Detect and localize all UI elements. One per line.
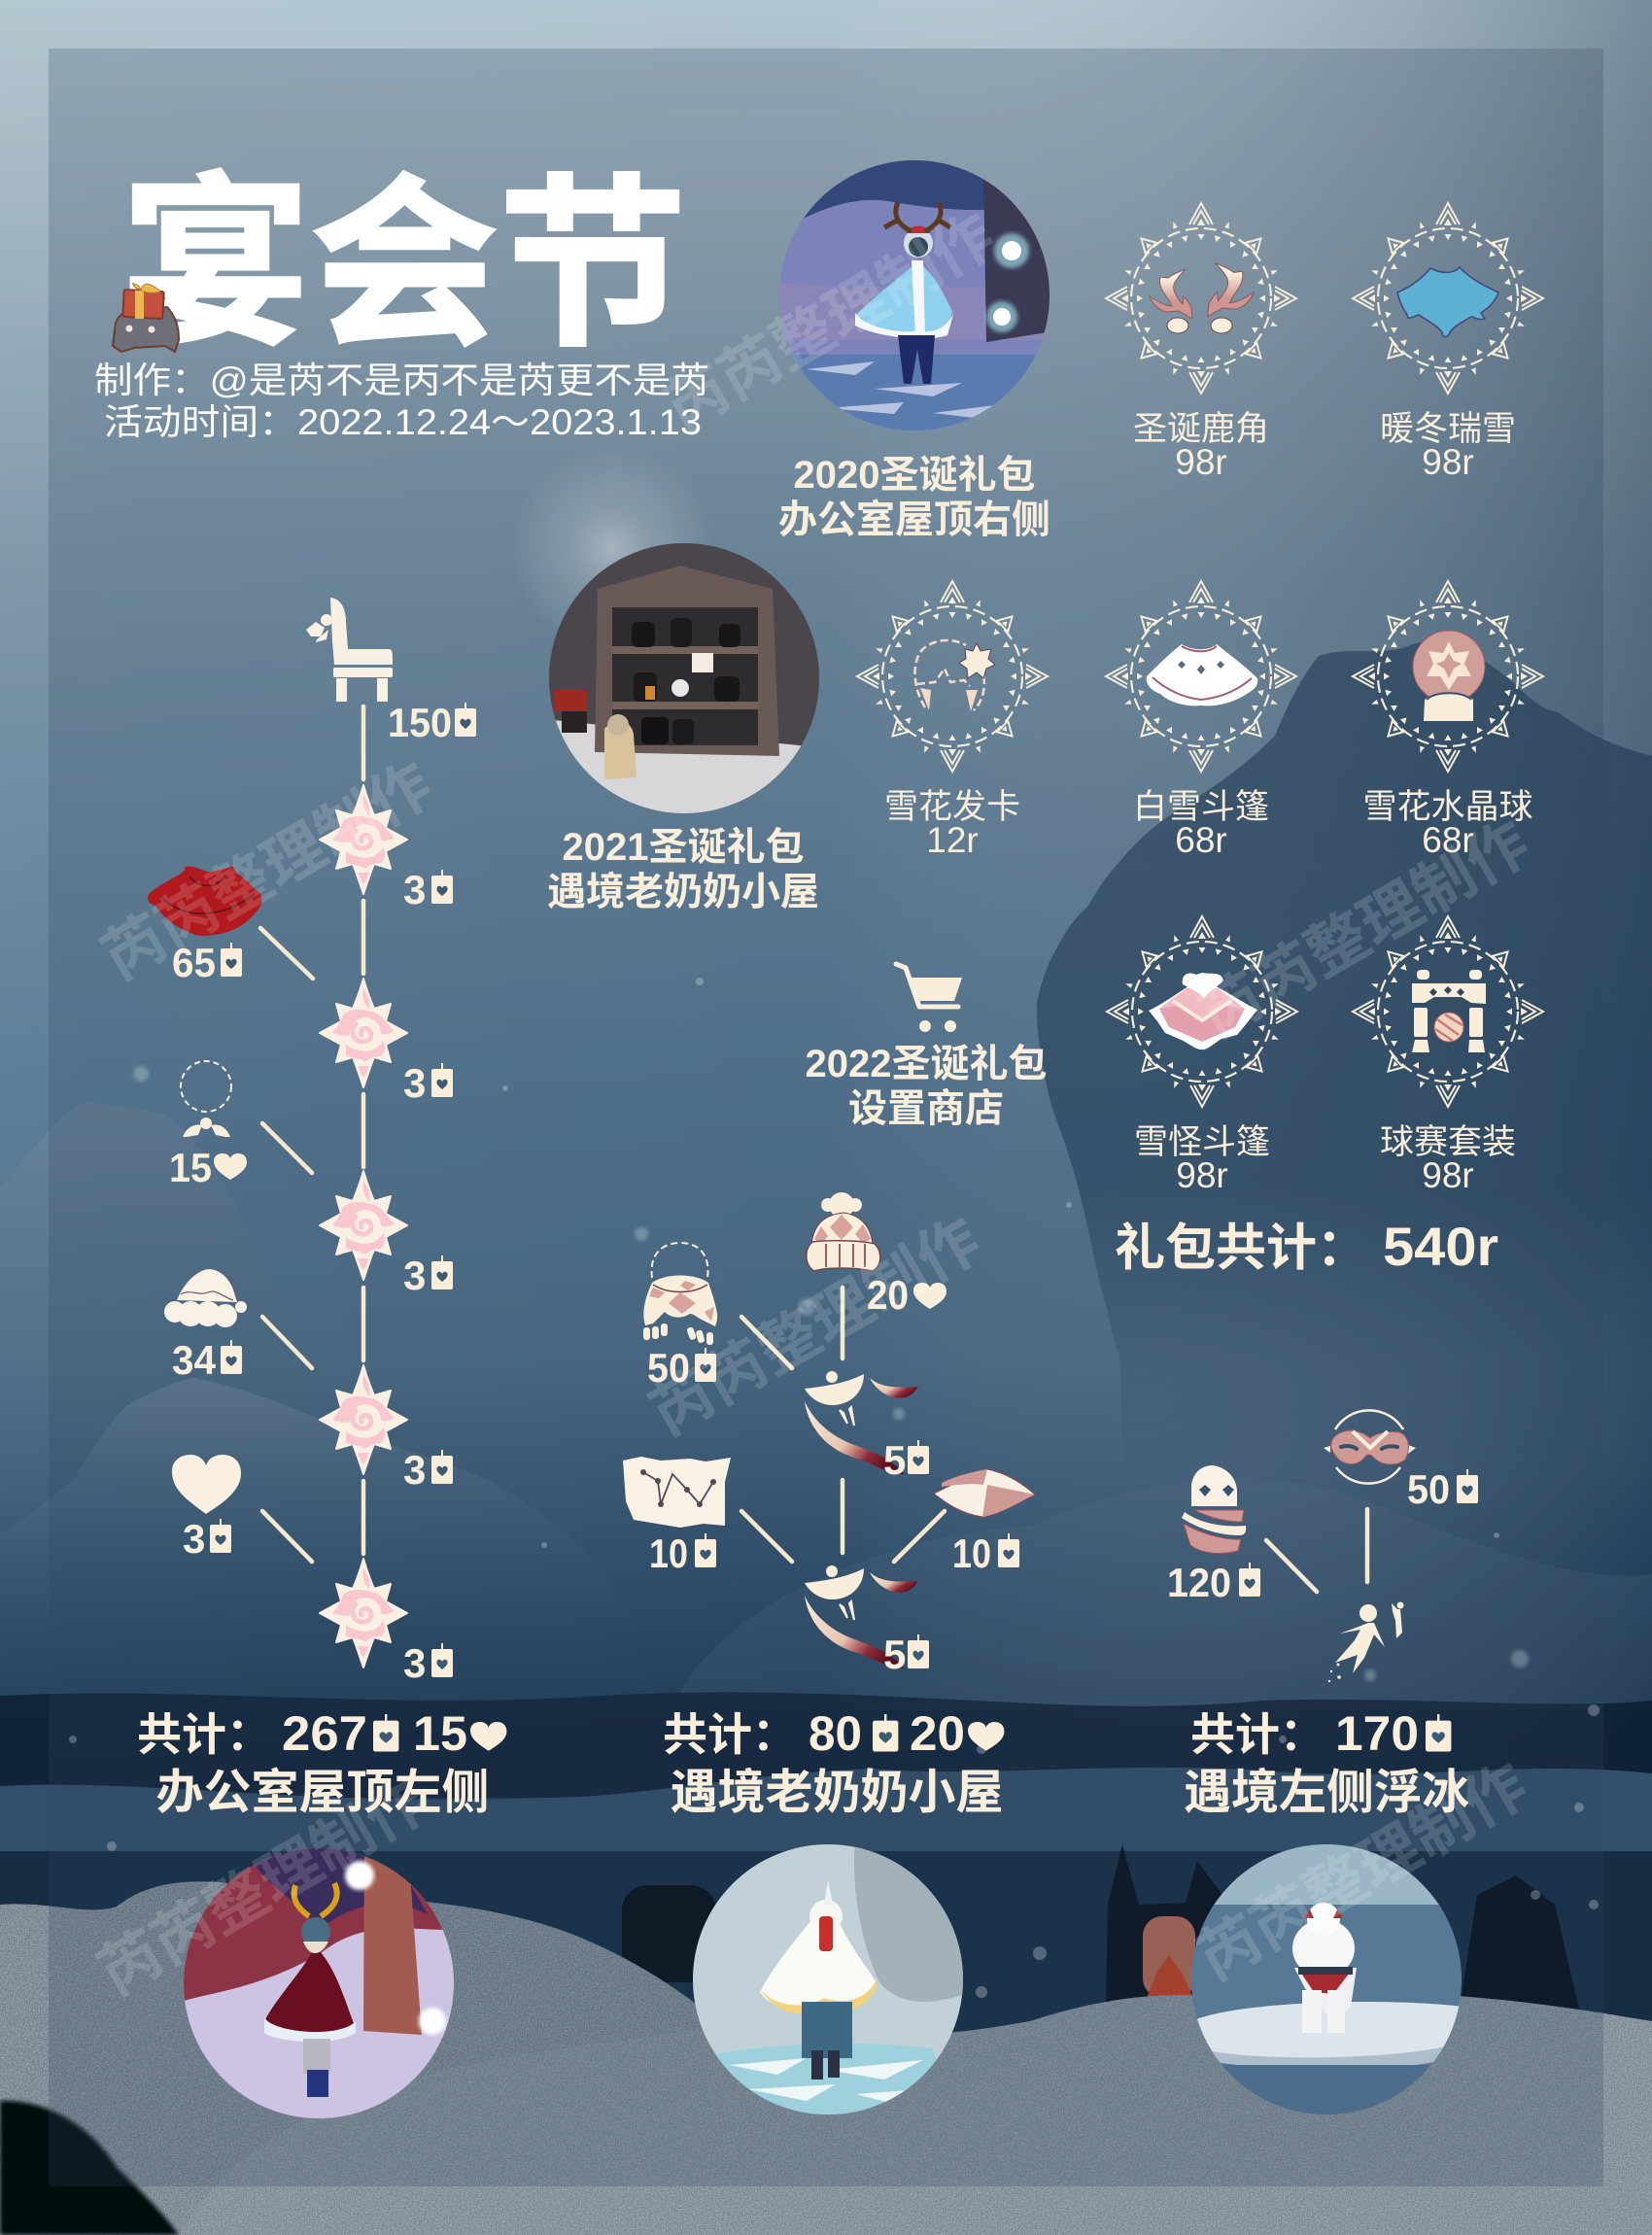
cost: 3 candles (403, 1253, 453, 1298)
cost: 3 candles: 3 (403, 1640, 426, 1686)
cost: 3 candles: 3 (403, 1060, 426, 1106)
icon: snow hat (164, 1269, 247, 1327)
title: 宴会节 (121, 163, 687, 369)
cost: 65 candles: 65 (172, 940, 216, 985)
label: christmas antlers (1133, 410, 1269, 482)
cost: 10 candles (952, 1530, 1019, 1576)
heading: 2020 gift pack: 2020圣诞礼包 (794, 454, 1035, 497)
label: warm winter shawl: 暖冬瑞雪 (1380, 410, 1516, 448)
cost: 3 candles (403, 1640, 453, 1686)
cost: 5 candles (883, 1437, 929, 1483)
heading: 2021 gift pack: 遇境老奶奶小屋 (547, 871, 819, 913)
icon: spirit star 4 (320, 1365, 407, 1474)
cost: 10 candles (649, 1530, 716, 1576)
cost: 3 candles: 3 (403, 1253, 426, 1298)
label: white snow cape: 白雪斗篷 (1133, 788, 1269, 826)
item: yeti cape (1107, 916, 1297, 1107)
total: grandma cabin: 20 (910, 1706, 965, 1761)
item: warm winter shawl (1353, 203, 1543, 394)
cost: 3 candles: 3 (403, 1447, 426, 1493)
icon: goal posts and ball (1412, 970, 1486, 1052)
total: grandma cabin: 遇境老奶奶小屋 (670, 1767, 1004, 1819)
cost: 34 candles: 34 (172, 1337, 217, 1383)
heading: 2022 gift pack: 2022圣诞礼包 (806, 1043, 1047, 1085)
icon: spirit star 2 (320, 979, 407, 1087)
item: snowflake hairpin (857, 581, 1048, 772)
photo: bottom right location (1187, 1841, 1469, 2123)
cost: 3 candles (403, 1060, 453, 1106)
total: office roof left: 267 (282, 1706, 367, 1761)
total: left floating ice: 共计： (1190, 1709, 1325, 1760)
total: grandma cabin: 共计： (663, 1709, 797, 1760)
label: snowflake hairpin (884, 788, 1020, 860)
icon: white cape (1147, 644, 1257, 705)
icon: hairpin (915, 640, 995, 711)
label: match costume set (1380, 1123, 1516, 1195)
cost: 5 candles (883, 1632, 929, 1677)
cost: 20 hearts (867, 1272, 946, 1318)
credit and event dates: 活动时间：2022.12.24～2023.1.13 (104, 402, 702, 442)
cost: 20 hearts: 20 (867, 1272, 909, 1318)
icon: spirit star 5 (320, 1559, 407, 1668)
label: white snow cape (1133, 788, 1269, 860)
connector lines (1266, 1509, 1367, 1592)
cost: 50 candles (1407, 1466, 1478, 1512)
total: grandma cabin (663, 1706, 1004, 1819)
cost: 34 candles (172, 1337, 242, 1383)
icon: dashed necklace with holly bow (181, 1061, 231, 1137)
cost: 65 candles (172, 940, 242, 985)
credit and event dates: 制作：@是芮不是丙不是芮更不是芮 (94, 361, 709, 400)
photo: 2021 gift location (549, 543, 819, 813)
watermarks: 芮芮整理制作 (87, 1766, 440, 2009)
icon: diamond beanie (807, 1192, 880, 1271)
icon: pillow (934, 1469, 1035, 1517)
heading: 2021 gift pack (547, 826, 819, 913)
tree: office roof left (148, 598, 476, 1686)
icon: large heart (172, 1455, 241, 1514)
total: left floating ice: 遇境左侧浮冰 (1184, 1767, 1469, 1819)
connector lines (741, 1288, 945, 1562)
icon: torn constellation map (623, 1457, 731, 1528)
item: snowflake crystal ball (1353, 581, 1543, 772)
icon: spirit upper (805, 1371, 918, 1474)
watermarks: 芮芮整理制作 (1188, 808, 1541, 1051)
label: snowflake crystal ball (1362, 788, 1533, 860)
photo: bottom middle location (690, 1841, 972, 2123)
icon: yeti cape (1149, 973, 1257, 1049)
cost: 3 candles: 3 (183, 1516, 205, 1562)
label: warm winter shawl: 98r (1422, 442, 1474, 482)
item: christmas antlers (1106, 203, 1296, 394)
icon: red cape (148, 867, 262, 936)
cost: 50 candles: 50 (1407, 1466, 1450, 1512)
photo: 2020 gift location (777, 155, 1059, 437)
connector lines (260, 706, 363, 1562)
label: yeti cape: 雪怪斗篷 (1134, 1123, 1270, 1161)
heading: 2022 gift pack: 设置商店 (848, 1087, 1004, 1130)
cost: 3 candles (183, 1516, 231, 1562)
icon: spirit lower (805, 1565, 918, 1668)
icon: blue shawl (1397, 267, 1498, 336)
icon: spirit star 1 (320, 785, 407, 894)
credit and event dates (94, 361, 709, 442)
label: snowflake hairpin: 雪花发卡 (884, 788, 1020, 826)
heading: 2021 gift pack: 2021圣诞礼包 (563, 826, 804, 869)
item: white snow cape (1106, 581, 1296, 772)
watermarks (87, 201, 1541, 2009)
cost: 50 candles (647, 1345, 716, 1391)
gift pack total (1115, 1216, 1498, 1277)
total: office roof left: 15 (413, 1706, 467, 1761)
cost: 50 candles: 50 (647, 1345, 690, 1391)
cost: 3 candles (403, 1447, 453, 1493)
watermarks: 芮芮整理制作 (639, 1206, 992, 1449)
watermarks: 芮芮整理制作 (654, 201, 1007, 444)
label: match costume set: 球赛套装 (1380, 1123, 1516, 1161)
photo: bottom left location (180, 1846, 462, 2128)
total: left floating ice: 170 (1335, 1706, 1419, 1761)
icon: spirit star 3 (320, 1171, 407, 1280)
heading: 2020 gift pack (778, 454, 1050, 541)
watermarks: 芮芮整理制作 (1187, 1751, 1539, 1994)
label: christmas antlers: 圣诞鹿角 (1133, 410, 1269, 448)
label: yeti cape (1134, 1123, 1270, 1195)
icon: holly chair (306, 598, 393, 702)
icon: scarf with dashed loop (643, 1243, 717, 1345)
icon: yeti (1182, 1465, 1246, 1553)
total: left floating ice (1184, 1706, 1469, 1819)
falling snow particles (69, 978, 1600, 1998)
icon: flying spirit with child (1328, 1601, 1403, 1682)
item: match costume set (1353, 916, 1543, 1107)
total: office roof left: 办公室屋顶左侧 (155, 1767, 490, 1819)
total: office roof left (137, 1706, 506, 1819)
label: warm winter shawl (1380, 410, 1516, 482)
gift pack total: 540r (1383, 1216, 1498, 1277)
label: snowflake crystal ball: 68r (1422, 820, 1474, 860)
cost: 120 candles: 120 (1167, 1560, 1231, 1605)
label: white snow cape: 68r (1175, 820, 1227, 860)
total: office roof left: 共计： (137, 1709, 271, 1760)
cost: 5 candles: 5 (883, 1437, 906, 1483)
icon: crystal ball (1413, 631, 1485, 721)
icon: antlers (1150, 263, 1254, 333)
label: match costume set: 98r (1422, 1155, 1474, 1195)
total: grandma cabin: 80 (809, 1706, 862, 1761)
label: yeti cape: 98r (1176, 1155, 1228, 1195)
tree: left floating ice (1167, 1410, 1478, 1682)
tree: grandma cabin (623, 1192, 1035, 1677)
cost: 10 candles: 10 (952, 1530, 991, 1576)
cost: 5 candles: 5 (883, 1632, 906, 1677)
watermarks: 芮芮整理制作 (91, 750, 444, 993)
label: christmas antlers: 98r (1175, 442, 1227, 482)
cost: 150 candles: 150 (388, 700, 452, 745)
heading: 2020 gift pack: 办公室屋顶右侧 (778, 499, 1050, 541)
icon: mask in circle (1324, 1410, 1416, 1484)
gift pack total: 礼包共计： (1115, 1221, 1367, 1277)
cost: 15 hearts: 15 (169, 1145, 212, 1190)
icon: rock mascot with gift (113, 283, 179, 352)
cost: 3 candles (403, 867, 453, 912)
label: snowflake crystal ball: 雪花水晶球 (1362, 788, 1533, 826)
cost: 10 candles: 10 (649, 1530, 688, 1576)
label: snowflake hairpin: 12r (926, 820, 979, 860)
heading: 2022 gift pack (806, 1043, 1047, 1130)
icon: shopping cart (896, 964, 962, 1032)
cost: 15 hearts (169, 1145, 247, 1190)
cost: 3 candles: 3 (403, 867, 426, 912)
